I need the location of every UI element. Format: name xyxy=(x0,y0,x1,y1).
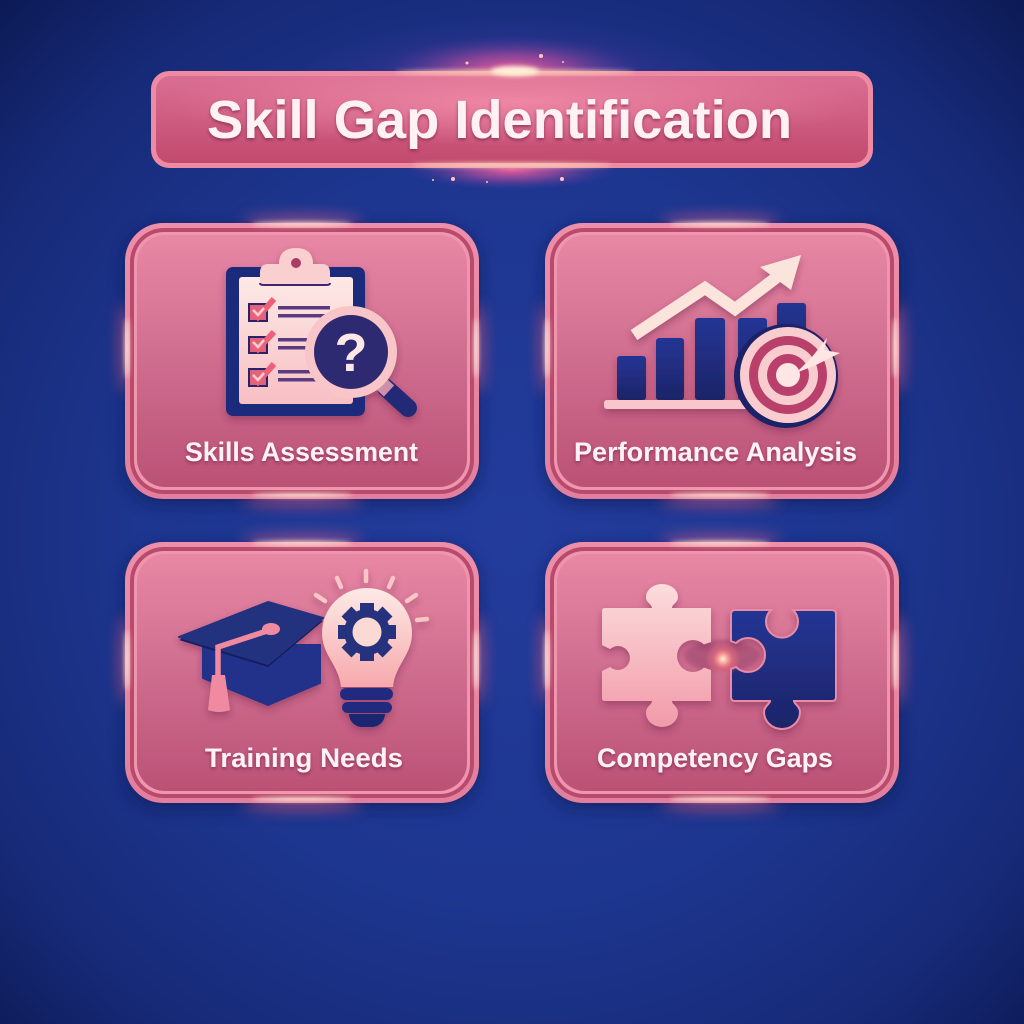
icon: clipboard with magnifier xyxy=(226,248,408,416)
icon: light puzzle piece xyxy=(602,584,711,727)
panel: competency gaps xyxy=(539,534,905,811)
title glow xyxy=(272,15,752,190)
shaded gap between pieces xyxy=(684,640,760,672)
label: Skills Assessment xyxy=(185,437,418,467)
card frame xyxy=(119,215,485,507)
icon: bar chart with arrow and target xyxy=(604,255,840,428)
title bottom glow xyxy=(412,163,612,167)
panel: performance analysis xyxy=(539,215,905,507)
label: Performance Analysis xyxy=(574,437,857,467)
card frame xyxy=(119,534,485,811)
icon: graduation cap xyxy=(179,602,323,712)
panel: skills assessment xyxy=(119,215,485,507)
label: Training Needs xyxy=(205,743,403,773)
label: Competency Gaps xyxy=(597,743,833,773)
icon: navy puzzle piece xyxy=(731,610,836,729)
panel: title banner xyxy=(151,54,873,183)
glow spark xyxy=(705,641,741,677)
title top glow xyxy=(395,66,635,76)
card frame xyxy=(539,215,905,507)
card frame xyxy=(539,534,905,811)
icon: clipboard with magnifier: ? xyxy=(334,323,368,383)
sparkles xyxy=(432,54,564,183)
icon: light bulb with gear xyxy=(316,571,427,727)
panel: training needs xyxy=(119,534,485,811)
heading: Skill Gap Identification xyxy=(207,90,792,150)
